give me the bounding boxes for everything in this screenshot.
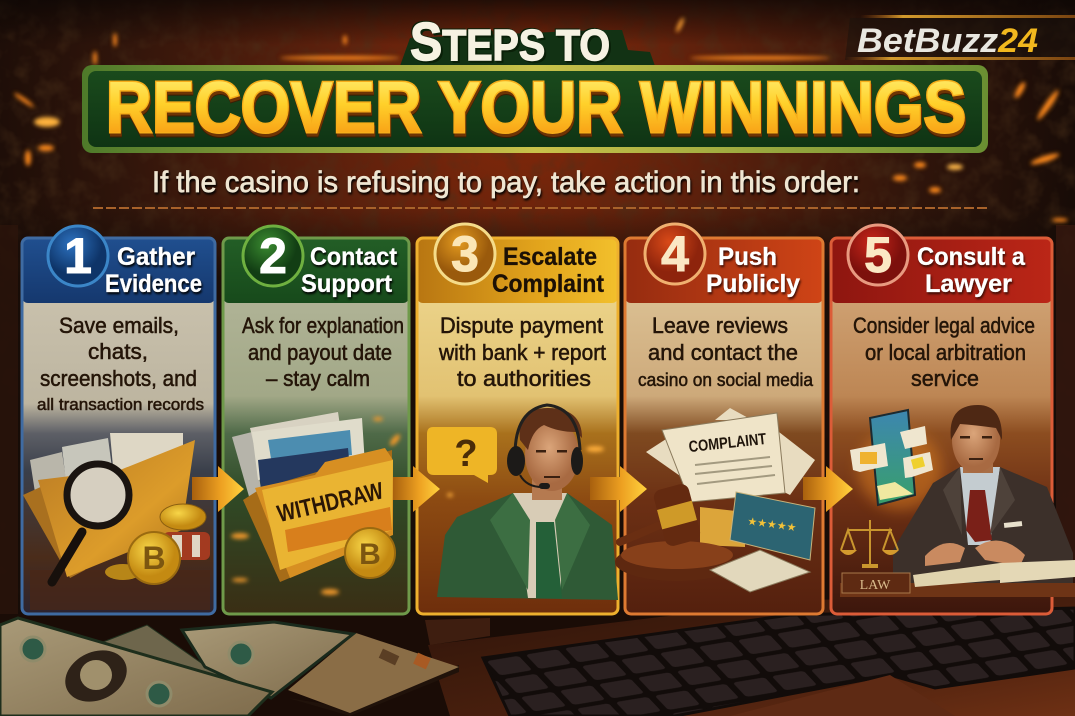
body text 3: with bank + report [438, 340, 606, 365]
badge 2: 2 [259, 228, 287, 284]
badge 1 [48, 226, 108, 286]
illustration: complaint, gavel and review card: COMPLAINT [688, 431, 767, 456]
heading 2: Support [301, 270, 393, 298]
banknotes [0, 618, 459, 716]
illustration: support agent with question bubble [427, 405, 618, 600]
title banner [82, 12, 988, 153]
subtitle: If the casino is refusing to pay, take action in this order: [152, 166, 860, 199]
logo: BetBuzz24 [845, 14, 1075, 60]
badge 5: 5 [864, 227, 892, 283]
heading 4 [706, 243, 800, 298]
illustration: phone with chat bubbles [850, 410, 942, 510]
badge 1: 1 [64, 228, 92, 284]
arrow 3 to 4 [590, 466, 647, 512]
badge 2 [243, 226, 303, 286]
illustration: desk, law book and scales: LAW [860, 578, 891, 593]
card 2 background [223, 238, 409, 614]
heading 2: Contact [310, 243, 398, 271]
body text 5: service [911, 366, 979, 391]
body text 5: Consider legal advice [853, 313, 1035, 338]
heading 4: Publicly [706, 270, 800, 298]
heading 3 [492, 243, 605, 298]
body text 2: – stay calm [266, 366, 370, 391]
heading 3: Complaint [492, 270, 605, 298]
card 5 background [831, 238, 1052, 614]
body text 1: chats, [88, 339, 148, 364]
panel: step 5 consult a lawyer [831, 225, 1075, 614]
arrow 4 to 5 [803, 466, 853, 512]
heading 1: Gather [117, 243, 195, 271]
body text 4: Leave reviews [652, 313, 788, 338]
heading 5: Consult a [917, 243, 1026, 271]
arrow 2 to 3 [393, 466, 440, 512]
body text 5: or local arbitration [865, 340, 1026, 365]
body text 1: all transaction records [37, 395, 204, 414]
illustration: desk, law book and scales [840, 520, 1075, 597]
heading 4: Push [718, 243, 777, 271]
illustration: withdraw folder and coin: B [359, 538, 381, 571]
illustration: withdraw folder and coin: WITHDRAW [275, 477, 386, 528]
small heading: STEPS TO [410, 12, 610, 72]
badge 3: 3 [451, 226, 479, 282]
heading 5: Lawyer [925, 270, 1012, 298]
illustration: lawyer at desk [893, 405, 1073, 590]
body text 4: and contact the [648, 340, 798, 365]
heading 2 [301, 243, 398, 298]
badge 5 [848, 225, 908, 285]
body text 5 [853, 313, 1035, 391]
panel: step 1 gather evidence [22, 226, 215, 614]
body text 4 [638, 313, 814, 390]
panel: step 4 push publicly [615, 224, 823, 614]
body text 3: to authorities [457, 366, 591, 391]
body text 2: Ask for explanation [242, 313, 404, 338]
card 4 background [625, 238, 823, 614]
panel: step 3 escalate complaint [417, 224, 618, 614]
logo: BetBuzz24: BetBuzz24 [857, 22, 1038, 60]
card 3 background [417, 238, 618, 614]
body text 3: Dispute payment [440, 313, 603, 338]
desk scene: cash and laptop [0, 596, 1075, 716]
laptop [425, 596, 1075, 716]
green banner plate [82, 30, 988, 153]
heading 3: Escalate [503, 243, 597, 271]
heading 1: Evidence [105, 270, 202, 298]
body text 4: casino on social media [638, 370, 814, 390]
heading 1 [105, 243, 202, 298]
illustration: folder with magnifier and coins: B [142, 540, 166, 576]
illustration: support agent with question bubble: ? [454, 433, 478, 475]
heading 5 [917, 243, 1026, 298]
badge 4: 4 [661, 226, 689, 282]
arrow 1 to 2 [192, 466, 244, 512]
body text 1 [37, 313, 204, 414]
main heading: RECOVER YOUR WINNINGS [106, 68, 966, 148]
body text 1: screenshots, and [40, 366, 197, 391]
card 1 background [22, 238, 215, 614]
body text 2 [242, 313, 404, 391]
body text 1: Save emails, [59, 313, 179, 338]
body text 2: and payout date [248, 340, 392, 365]
badge 4 [645, 224, 705, 284]
body text 3 [438, 313, 606, 391]
panel: step 2 contact support [223, 226, 409, 614]
illustration: complaint, gavel and review card: ★★★★★ [747, 516, 797, 534]
badge 3 [435, 224, 495, 284]
illustration: withdraw folder and coin [231, 412, 402, 595]
illustration: complaint, gavel and review card [615, 408, 815, 592]
illustration: folder with magnifier and coins [23, 433, 210, 610]
